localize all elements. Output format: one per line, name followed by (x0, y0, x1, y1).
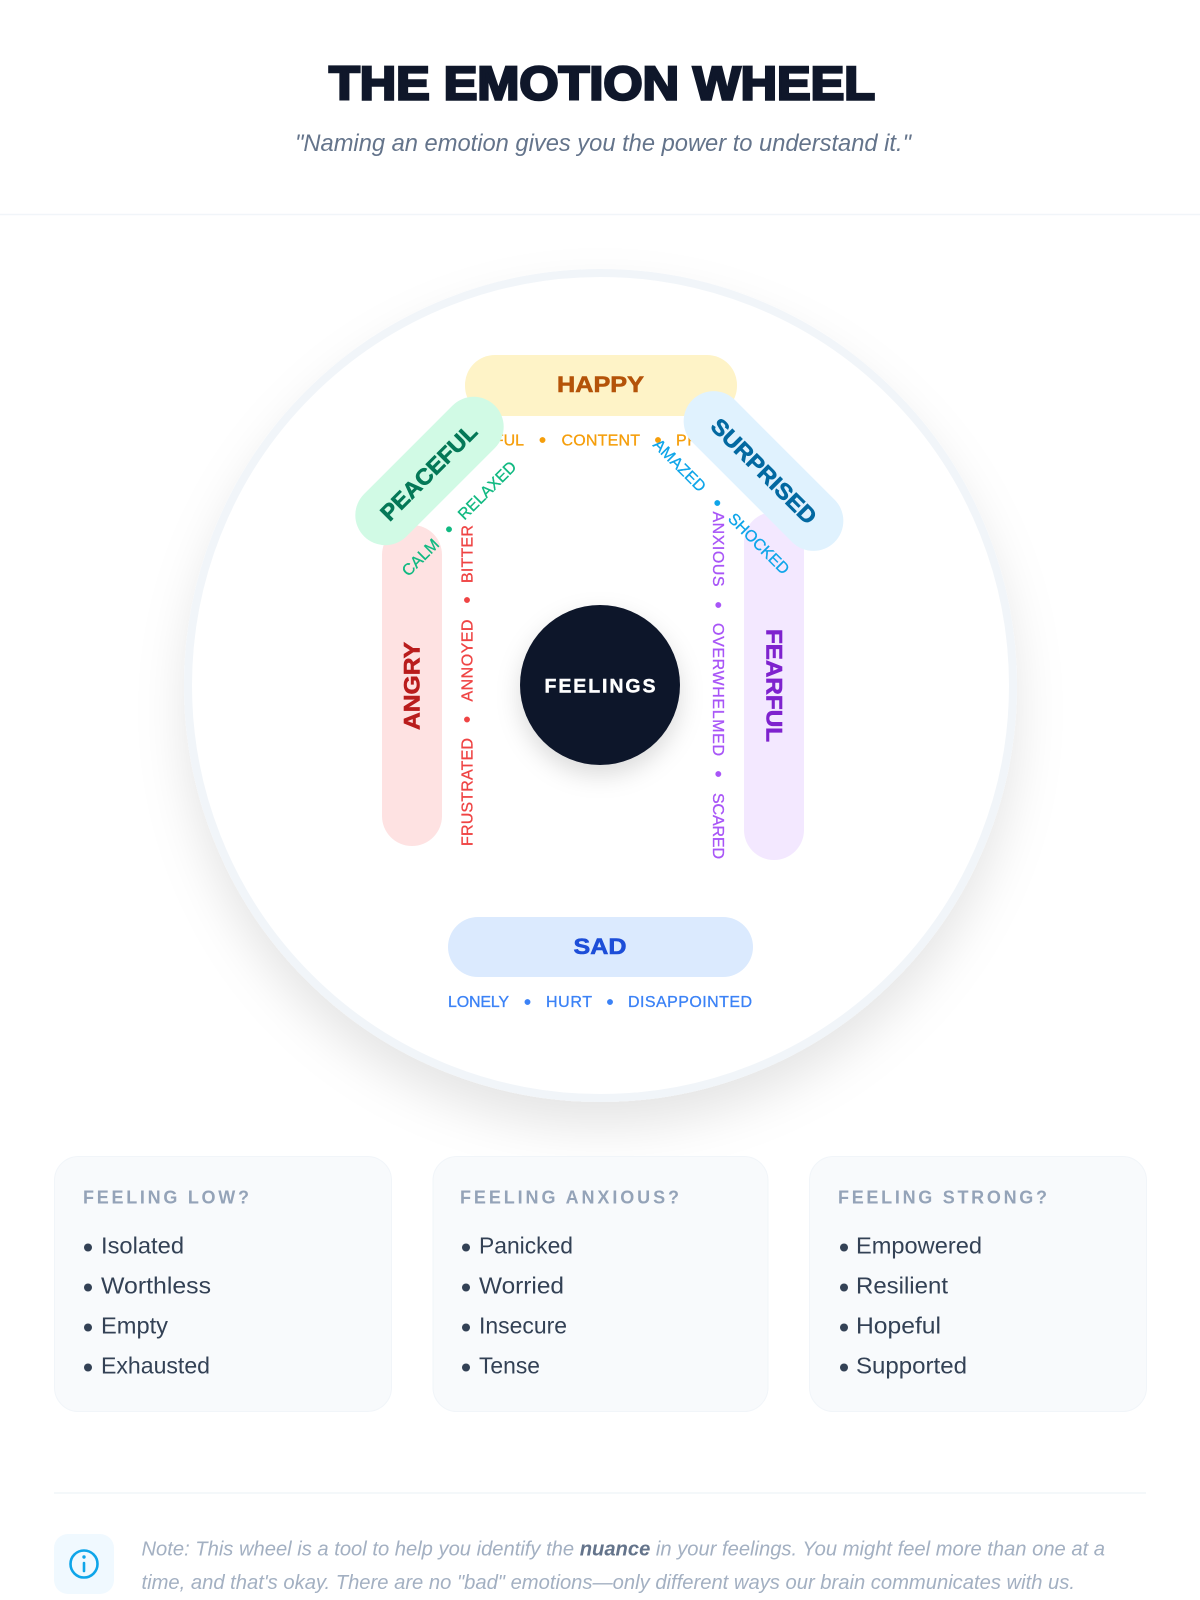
segment: surprised (649, 379, 856, 578)
list: low feelings: Isolated (101, 1232, 184, 1258)
wheel circle (188, 273, 1013, 1098)
segment: peaceful: CALM (399, 536, 443, 580)
panel: feeling anxious (433, 1156, 768, 1412)
segment: sad: SAD (574, 934, 626, 959)
panel: emotion wheel (188, 273, 1013, 1098)
segment: angry (382, 525, 477, 846)
segment: happy: JOYFUL (463, 432, 524, 450)
list: anxious feelings: Tense (479, 1352, 540, 1378)
list: anxious feelings (462, 1232, 573, 1378)
segment: surprised: SHOCKED (724, 510, 792, 578)
segment: sad: DISAPPOINTED (628, 994, 752, 1011)
segment: sad (448, 917, 753, 1011)
note text: time, and that's okay. There are no "bad" emotions—only different ways our brain communicates with us. (142, 1572, 1075, 1594)
list: anxious feelings: Panicked (479, 1232, 573, 1258)
list: strong feelings: Resilient (856, 1272, 949, 1298)
segment: angry: FRUSTRATED (460, 738, 477, 846)
segment: peaceful: PEACEFUL (375, 419, 482, 526)
panel: feeling low (54, 1156, 392, 1412)
segment: happy: HAPPY (557, 372, 644, 397)
segment: fearful: FEARFUL (762, 629, 787, 742)
segment: happy: CONTENT (562, 432, 640, 450)
list: strong feelings: Supported (856, 1352, 967, 1378)
segment: peaceful (343, 384, 520, 580)
list: low feelings: Worthless (101, 1272, 211, 1298)
title: THE EMOTION WHEEL (329, 57, 875, 110)
list: strong feelings: Hopeful (856, 1312, 941, 1338)
list: anxious feelings: Insecure (479, 1312, 567, 1338)
segment: angry: ANNOYED (460, 620, 477, 702)
segment: angry: BITTER (460, 525, 477, 583)
center hub: feelings: FEELINGS (544, 676, 656, 698)
center hub: feelings (520, 605, 680, 765)
segment: happy: PROUD (676, 432, 736, 450)
icon: info (54, 1534, 114, 1594)
list: strong feelings: Empowered (856, 1232, 982, 1258)
note text: Note: This wheel is a tool to help you identify the nuance in your feelings. You might feel more than one at a (142, 1538, 1105, 1560)
segment: sad: HURT (546, 994, 592, 1011)
segment: happy (463, 355, 737, 450)
subtitle quote: "Naming an emotion gives you the power to understand it." (295, 130, 912, 157)
segment: fearful: SCARED (709, 793, 726, 859)
card heading: FEELING ANXIOUS? (460, 1188, 679, 1208)
segment: surprised: SURPRISED (706, 413, 822, 529)
list: strong feelings (840, 1232, 982, 1378)
footer note (54, 1534, 1105, 1594)
segment: fearful: OVERWHELMED (709, 623, 726, 756)
segment: peaceful: RELAXED (455, 459, 520, 524)
segment: fearful (709, 512, 804, 860)
list: low feelings (84, 1232, 211, 1378)
card heading: FEELING STRONG? (838, 1188, 1047, 1208)
list: low feelings: Exhausted (101, 1352, 210, 1378)
panel: feeling strong (810, 1156, 1146, 1412)
segment: surprised: AMAZED (649, 436, 709, 496)
segment: sad: LONELY (448, 994, 509, 1011)
card heading: FEELING LOW? (83, 1188, 249, 1208)
note text (142, 1538, 1105, 1594)
segment: fearful: ANXIOUS (709, 512, 726, 586)
list: low feelings: Empty (101, 1312, 169, 1338)
segment: angry: ANGRY (400, 642, 424, 730)
header (295, 57, 912, 157)
list: anxious feelings: Worried (479, 1272, 564, 1298)
